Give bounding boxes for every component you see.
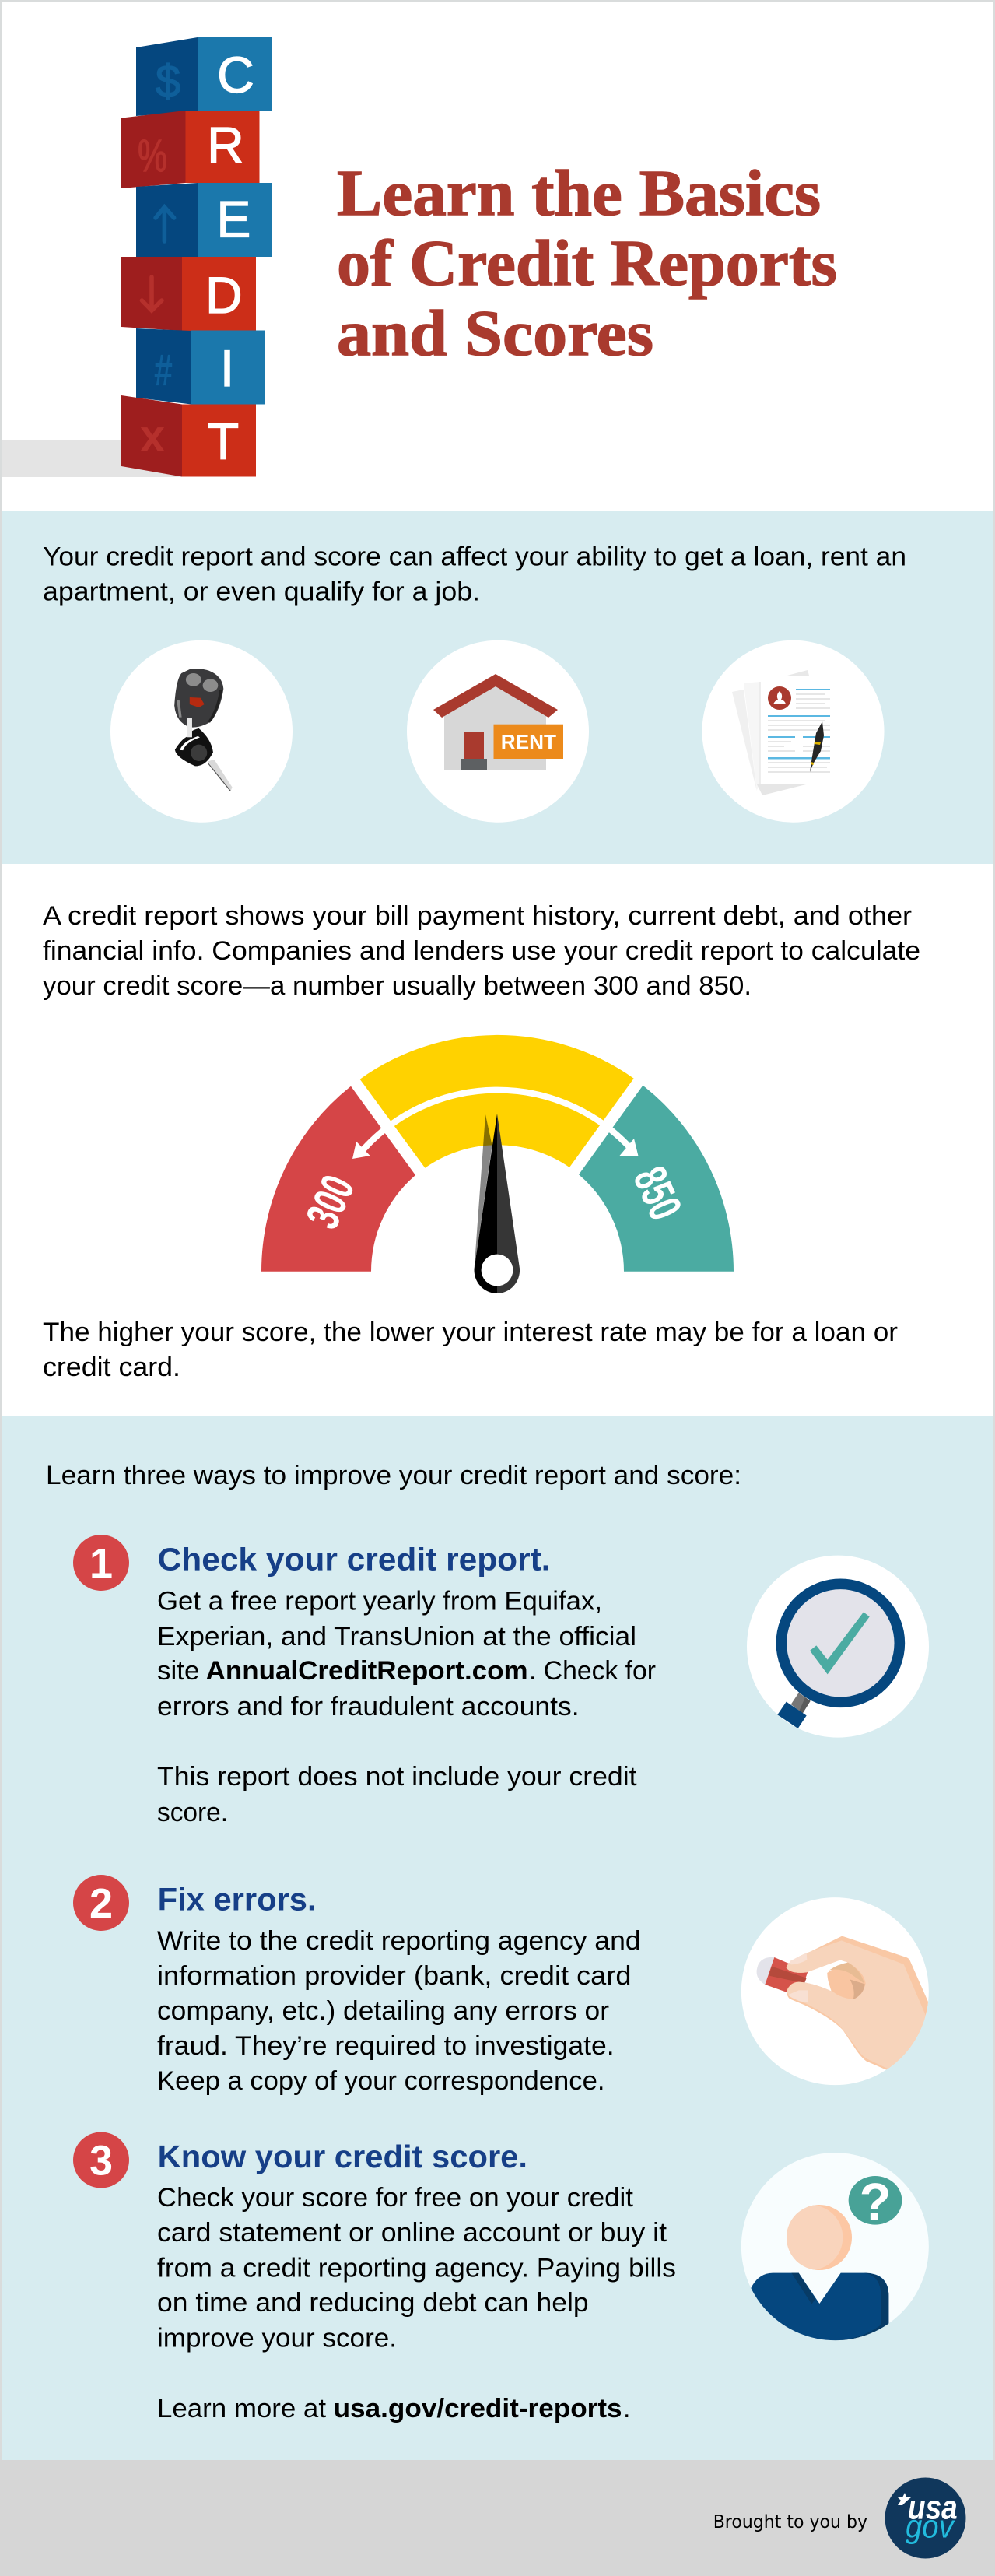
icon: house for rent: RENT: [501, 731, 556, 754]
step 2: Keep a copy of your correspondence.: [157, 2066, 605, 2096]
icon: credit block stack: R: [207, 117, 244, 174]
text: intro: [43, 542, 906, 607]
step 3: Learn more at: [157, 2394, 327, 2423]
step 2: company, etc.) detailing any errors or: [157, 1996, 609, 2026]
step 2: fraud. They’re required to investigate.: [157, 2031, 615, 2061]
step 3: on time and reducing debt can help: [157, 2288, 589, 2318]
text: higher score: credit card.: [43, 1353, 180, 1382]
icon: credit block stack: $: [156, 56, 180, 107]
icon: credit block stack: E: [216, 191, 251, 248]
step 3: usa.gov/credit-reports: [334, 2394, 622, 2423]
icon: car keys: [110, 640, 293, 823]
step 1: [73, 1535, 656, 1827]
icon: credit block stack: C: [217, 46, 254, 104]
panel: header: [2, 2, 993, 511]
text: definition: A credit report shows your bill payment history, current debt, and other: [43, 901, 912, 931]
icon: person with question: [741, 2153, 929, 2348]
text: higher score: The higher your score, the lower your interest rate may be for a loan or: [43, 1318, 898, 1347]
step 3: .: [623, 2394, 630, 2423]
step 1: Get a free report yearly from Equifax,: [157, 1586, 602, 1616]
icon: credit block stack: I: [220, 339, 234, 397]
icon: credit block stack: T: [208, 412, 239, 470]
step 3: from a credit reporting agency. Paying bills: [157, 2254, 676, 2283]
step 3: 3: [89, 2137, 113, 2184]
icon: usagov logo: gov: [906, 2508, 955, 2545]
icon: credit block stack: x: [140, 411, 165, 462]
title: of Credit Reports: [337, 227, 837, 300]
text: attribution: Brought to you by: [713, 2512, 867, 2532]
panel: three ways to improve: [2, 1416, 993, 2460]
step 3: card statement or online account or buy it: [157, 2218, 667, 2248]
step 1: score.: [157, 1798, 228, 1827]
block shadow: [2, 440, 182, 477]
step 1: 1: [89, 1540, 113, 1587]
step 1: Check your credit report.: [158, 1542, 551, 1578]
chart: score gauge: 300: [296, 1167, 364, 1236]
panel: footer: [0, 2460, 995, 2576]
step 1: AnnualCreditReport.com: [206, 1656, 528, 1686]
icon: credit report documents: [702, 640, 884, 823]
icon: credit block stack: D: [205, 266, 243, 324]
step 2: 2: [89, 1880, 113, 1927]
text: definition: financial info. Companies and lenders use your credit report to calculate: [43, 936, 920, 966]
text: higher score: [43, 1318, 898, 1382]
text: lead-in: Learn three ways to improve your credit report and score:: [46, 1461, 741, 1490]
icon: credit block stack: %: [138, 131, 167, 181]
chart: score gauge: 850: [624, 1159, 692, 1227]
step 3: improve your score.: [157, 2324, 397, 2353]
arrow: score range: [352, 1090, 638, 1159]
icon: needle: [475, 1114, 520, 1293]
step 3: Check your score for free on your credit: [157, 2183, 634, 2213]
icon: credit block stack: [121, 37, 272, 476]
step 2: Fix errors.: [158, 1882, 317, 1918]
step 1: Experian, and TransUnion at the official: [157, 1622, 636, 1651]
title: and Scores: [337, 297, 653, 370]
step 3: Know your credit score.: [158, 2139, 527, 2174]
step 2: [73, 1875, 641, 2096]
title: Learn the Basics: [337, 157, 821, 230]
step 1: . Check for: [529, 1656, 656, 1686]
step 3: [73, 2132, 676, 2423]
panel: why credit matters: [2, 511, 993, 864]
step 2: Write to the credit reporting agency and: [157, 1926, 641, 1956]
step 1: This report does not include your credit: [157, 1762, 637, 1792]
icon: usagov logo: usa: [908, 2489, 958, 2527]
icon: house for rent: [407, 640, 589, 823]
icon: hand with eraser: [741, 1897, 930, 2091]
text: definition: [43, 901, 920, 1001]
step 1: site: [157, 1656, 199, 1686]
panel: credit score explanation: [2, 864, 993, 1416]
icon: credit block stack: #: [155, 346, 172, 394]
icon: magnifying glass: [747, 1556, 929, 1738]
icon: usagov logo: [885, 2478, 966, 2559]
text: intro: Your credit report and score can affect your ability to get a loan, rent an: [43, 542, 906, 572]
icon: person with question: ?: [860, 2174, 891, 2231]
title: [337, 157, 837, 370]
chart: score gauge: [261, 1035, 734, 1293]
text: intro: apartment, or even qualify for a job.: [43, 577, 480, 607]
step 1: errors and for fraudulent accounts.: [157, 1692, 580, 1721]
step 2: information provider (bank, credit card: [157, 1961, 632, 1991]
text: definition: your credit score—a number usually between 300 and 850.: [43, 971, 752, 1001]
